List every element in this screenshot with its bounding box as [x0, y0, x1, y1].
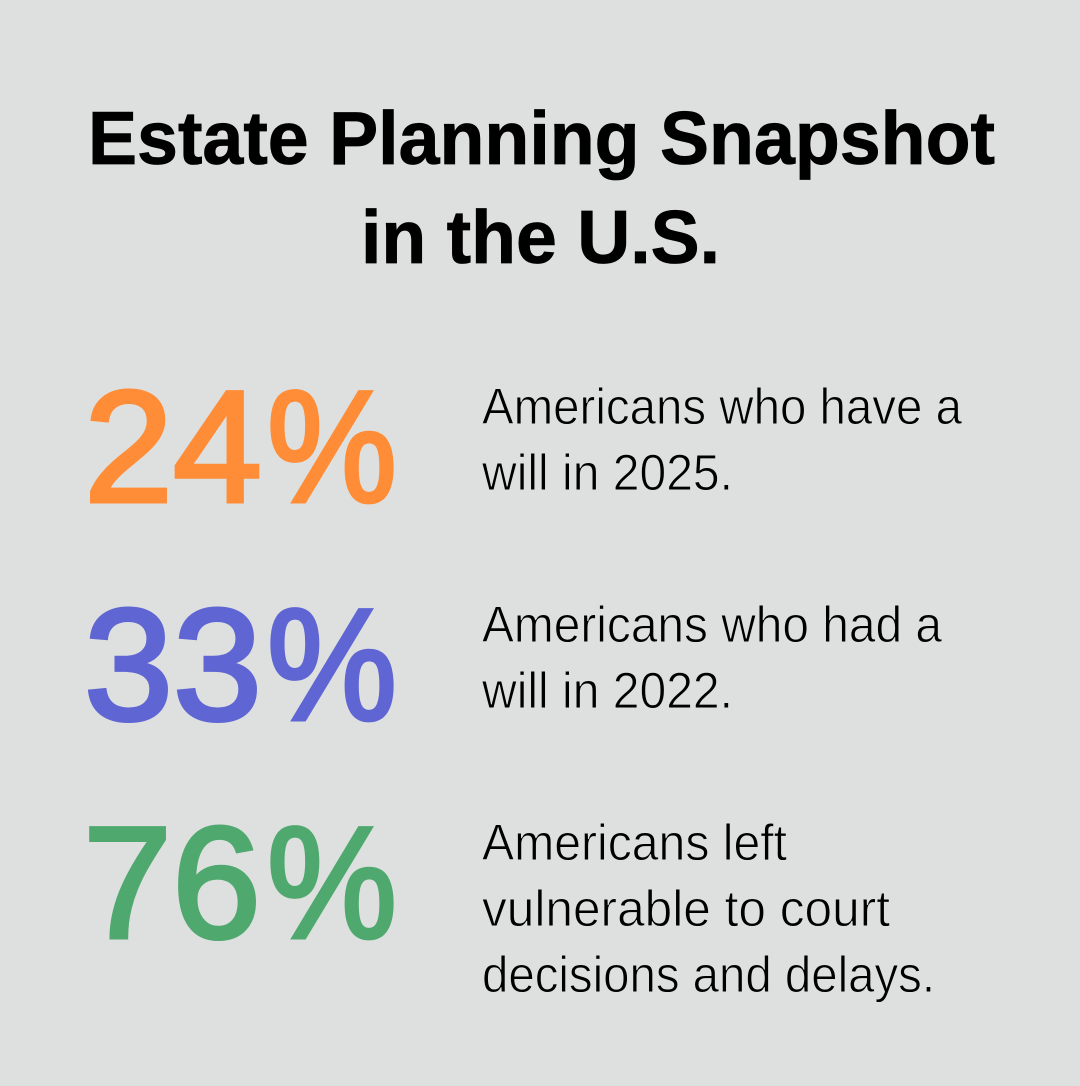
- stat number: 33%: 33: [84, 576, 262, 754]
- stat row: 33 percent: [84, 576, 943, 754]
- stat number: 24%: [84, 358, 397, 536]
- stat description: vulnerable to court decisions and delays: vulnerable to court: [482, 880, 890, 937]
- stat number: 24%: 24: [84, 358, 262, 536]
- stat row: 24 percent: [84, 358, 963, 536]
- stat number: 33%: %: [267, 576, 397, 754]
- stat description: vulnerable to court decisions and delays: Americans left: [482, 814, 787, 871]
- stat number: 24%: %: [267, 358, 397, 536]
- stat description: will in 2025: will in 2025.: [481, 444, 733, 501]
- stat description: will in 2022: will in 2022.: [481, 662, 733, 719]
- stat description: will in 2022: Americans who had a: [482, 596, 943, 653]
- stat row: 76 percent: [83, 794, 935, 1003]
- stat number: 76%: [83, 794, 397, 972]
- stat description: will in 2022: [481, 596, 943, 719]
- stat description: vulnerable to court decisions and delays: [482, 814, 935, 1003]
- stat number: 76%: 76: [83, 794, 261, 972]
- stat description: will in 2025: [481, 378, 963, 501]
- title: in the U.S.: [361, 195, 720, 279]
- stat description: will in 2025: Americans who have a: [482, 378, 963, 435]
- title: Estate Planning Snapshot: [88, 96, 995, 180]
- title: [88, 96, 995, 279]
- stat number: 33%: [84, 576, 397, 754]
- stat number: 76%: %: [267, 794, 397, 972]
- stat description: vulnerable to court decisions and delays: decisions and delays.: [482, 946, 935, 1003]
